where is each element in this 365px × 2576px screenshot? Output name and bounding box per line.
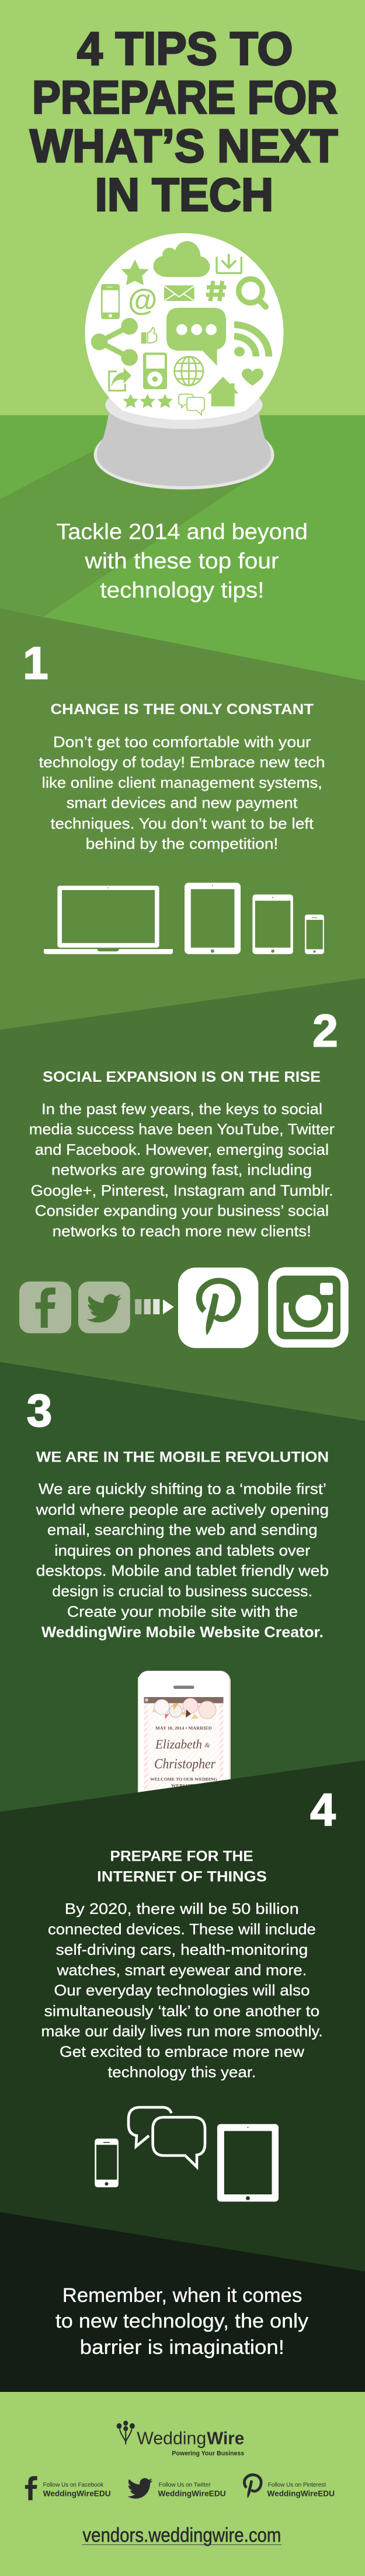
title: IN TECH — [95, 169, 273, 221]
panel: closing message — [0, 2213, 365, 2393]
icon: house — [207, 377, 238, 406]
icon: download tray — [217, 255, 241, 273]
icon: thumbs up — [141, 328, 157, 344]
closing text — [55, 2284, 308, 2359]
closing text: to new technology, the only — [55, 2310, 308, 2332]
icon: cloud — [154, 241, 210, 277]
icon: smartphone — [101, 284, 120, 319]
body text: tip 3: design is crucial to business success. — [52, 1583, 312, 1600]
follow pinterest text — [267, 2481, 335, 2498]
body text: tip 4: technology this year. — [107, 2063, 256, 2081]
number 1: 1 — [23, 638, 48, 689]
icon: music player — [143, 352, 167, 389]
follow facebook text: Follow Us on Facebook — [43, 2481, 104, 2488]
wedding site text: Christopher — [154, 1757, 216, 1772]
closing text: barrier is imagination! — [80, 2336, 284, 2359]
body text: tip 1: techniques. You don’t want to be left — [50, 815, 314, 832]
body text: tip 1: smart devices and new payment — [67, 794, 298, 812]
intro text: with these top four — [84, 549, 279, 574]
icon: at sign: @ — [127, 283, 157, 317]
icon: star — [121, 259, 149, 285]
icon: phone showing wedding website — [138, 1671, 231, 1834]
body text: tip 1: behind by the competition! — [86, 835, 278, 853]
panel: footer — [0, 2392, 365, 2576]
icon: rss — [234, 325, 269, 356]
wedding site text: MAY 10, 2014 • MARRIED — [155, 1725, 212, 1731]
body text: tip 3: We are quickly shifting to a ‘mobile first’ — [39, 1480, 326, 1498]
heading: social expansion: SOCIAL EXPANSION IS ON THE RISE — [43, 1069, 321, 1085]
icon: facebook f — [25, 2476, 37, 2500]
intro text: Tackle 2014 and beyond — [56, 520, 308, 545]
wedding site text: Elizabeth — [155, 1737, 202, 1751]
body text: tip 2: media success have been YouTube, Twitter — [29, 1120, 335, 1138]
number 2: 2 — [312, 1005, 338, 1056]
wedding site text: & — [204, 1741, 210, 1749]
body text: tip 4: simultaneously ‘talk’ to one another to — [44, 2002, 319, 2020]
body text: tip 4: Get excited to embrace more new — [60, 2043, 304, 2061]
background: header layers — [0, 0, 365, 684]
body text: tip 3: Create your mobile site with the — [67, 1603, 298, 1621]
body text: tip 4: self-driving cars, health-monitoring — [56, 1941, 308, 1958]
background: tip 4 — [0, 1760, 365, 2279]
icon: phone — [95, 2139, 119, 2187]
follow facebook text — [43, 2481, 111, 2498]
icon: speech bubble with dots — [166, 308, 226, 366]
icon: twitter — [78, 1282, 130, 1334]
body text: tip 2: Google+, Pinterest, Instagram and Tumblr. — [31, 1182, 333, 1199]
logo: WeddingWire — [117, 2421, 244, 2457]
body text: tip 3: WeddingWire Mobile Website Creator. — [41, 1623, 324, 1641]
title: WHAT’S NEXT — [30, 120, 338, 172]
title: 4 TIPS TO — [77, 23, 293, 75]
background: closing — [0, 2213, 365, 2393]
body text: tip 1 — [39, 733, 325, 853]
icon: magnifying glass — [239, 279, 266, 307]
body text: tip 2: networks are growing fast, including — [51, 1161, 312, 1179]
title — [30, 23, 338, 221]
follow twitter text: Follow Us on Twitter — [159, 2481, 211, 2488]
body text: tip 4: By 2020, there will be 50 billion — [65, 1900, 299, 1917]
icon: share nodes — [91, 318, 138, 366]
body text: tip 2: In the past few years, the keys to social — [41, 1100, 322, 1117]
icon: hashtag — [206, 281, 226, 301]
heading: mobile revolution: WE ARE IN THE MOBILE REVOLUTION — [36, 1449, 329, 1466]
logo wordmark: Wire — [207, 2428, 244, 2449]
number 3: 3 — [27, 1385, 52, 1436]
closing text: Remember, when it comes — [62, 2284, 302, 2307]
body text: tip 1: Don’t get too comfortable with your — [53, 733, 311, 750]
website link: vendors.weddingwire.com — [82, 2524, 281, 2546]
body text: tip 4: connected devices. These will include — [48, 1920, 316, 1938]
icon: social networks row — [19, 1267, 349, 1348]
icon: share arrow — [109, 368, 131, 390]
background: tip 1 — [0, 608, 365, 1052]
panel: tip 4 — [0, 1760, 365, 2279]
background: footer — [0, 2392, 365, 2576]
number 4: 4 — [310, 1784, 336, 1835]
body text: tip 2: networks to reach more new clients! — [53, 1222, 311, 1239]
follow pinterest text: Follow Us on Pinterest — [268, 2481, 326, 2488]
icon: devices row — [44, 882, 324, 954]
heading: internet of things: INTERNET OF THINGS — [97, 1868, 267, 1885]
icon: tablet small — [252, 895, 293, 954]
wedding site text: WEBSITE! — [171, 1783, 196, 1788]
body text: tip 4: Our everyday technologies will also — [54, 1982, 310, 1999]
icon: facebook — [19, 1282, 71, 1334]
icon: three stars — [123, 394, 173, 408]
intro text: technology tips! — [100, 579, 264, 603]
icon: pinterest p — [244, 2475, 261, 2498]
heading: internet of things: PREPARE FOR THE — [110, 1848, 253, 1865]
body text: tip 2: and Facebook. However, emerging social — [35, 1141, 329, 1158]
icon: small chat bubbles — [179, 394, 204, 415]
flowers — [152, 1698, 216, 1719]
body text: tip 4: watches, smart eyewear and more. — [57, 1961, 307, 1979]
body text: tip 4: make our daily lives run more smoothly. — [41, 2023, 323, 2040]
heading: change is the only constant: CHANGE IS THE ONLY CONSTANT — [50, 701, 314, 718]
body text: tip 4 — [41, 1900, 323, 2081]
icon: heart — [242, 369, 263, 386]
icon: twitter bird — [127, 2478, 152, 2499]
body text: tip 3: world where people are actively opening — [36, 1501, 329, 1518]
intro text — [56, 520, 308, 603]
social follow row — [25, 2475, 335, 2500]
wedding site text: WELCOME TO OUR WEDDING — [150, 1777, 217, 1782]
follow twitter text — [158, 2481, 226, 2498]
follow twitter text: WeddingWireEDU — [158, 2489, 226, 2498]
body text: tip 2: Consider expanding your business’ social — [35, 1202, 329, 1220]
icon: web globe — [175, 356, 203, 386]
body text: tip 3: desktops. Mobile and tablet friendly web — [36, 1562, 329, 1580]
icon: laptop — [44, 886, 173, 954]
icon: pinterest — [178, 1268, 258, 1348]
icon: tablet large — [185, 882, 241, 954]
icon: connected devices talking — [95, 2107, 279, 2201]
wedding site text — [150, 1725, 217, 1788]
body text: tip 1: like online client management systems, — [42, 774, 322, 791]
body text: tip 3: inquires on phones and tablets over — [54, 1542, 311, 1559]
logo wordmark: Wedding — [137, 2428, 206, 2449]
body text: tip 3 — [36, 1480, 329, 1641]
panel: tip 2 — [0, 978, 365, 1426]
panel: header — [0, 0, 365, 684]
body text: tip 3: email, searching the web and sending — [47, 1521, 318, 1539]
arrow: fading bars to triangle — [135, 1299, 174, 1314]
logo tagline: Powering Your Business — [172, 2450, 244, 2457]
icon: logo bouquet — [117, 2421, 135, 2445]
panel: tip 3 — [0, 1362, 365, 1834]
icon: envelope — [164, 285, 194, 301]
background: tip 2 — [0, 978, 365, 1426]
body text: tip 1: technology of today! Embrace new tech — [39, 753, 325, 771]
icons in globe — [91, 241, 269, 408]
globe dome — [85, 233, 284, 420]
stand — [94, 381, 274, 490]
follow facebook text: WeddingWireEDU — [43, 2489, 111, 2498]
logo wordmark — [137, 2428, 244, 2449]
icon: phone — [305, 915, 324, 954]
body text: tip 2 — [29, 1100, 335, 1239]
icon: tablet — [217, 2124, 279, 2201]
title: PREPARE FOR — [32, 71, 338, 123]
icon: crystal ball with technology symbols — [85, 233, 284, 490]
heading: internet of things — [97, 1848, 267, 1885]
icon: instagram — [268, 1267, 349, 1348]
panel: tip 1 — [0, 608, 365, 1052]
icon: chat bubbles — [128, 2107, 205, 2167]
follow pinterest text: WeddingWireEDU — [267, 2489, 335, 2498]
background: tip 3 — [0, 1362, 365, 1823]
